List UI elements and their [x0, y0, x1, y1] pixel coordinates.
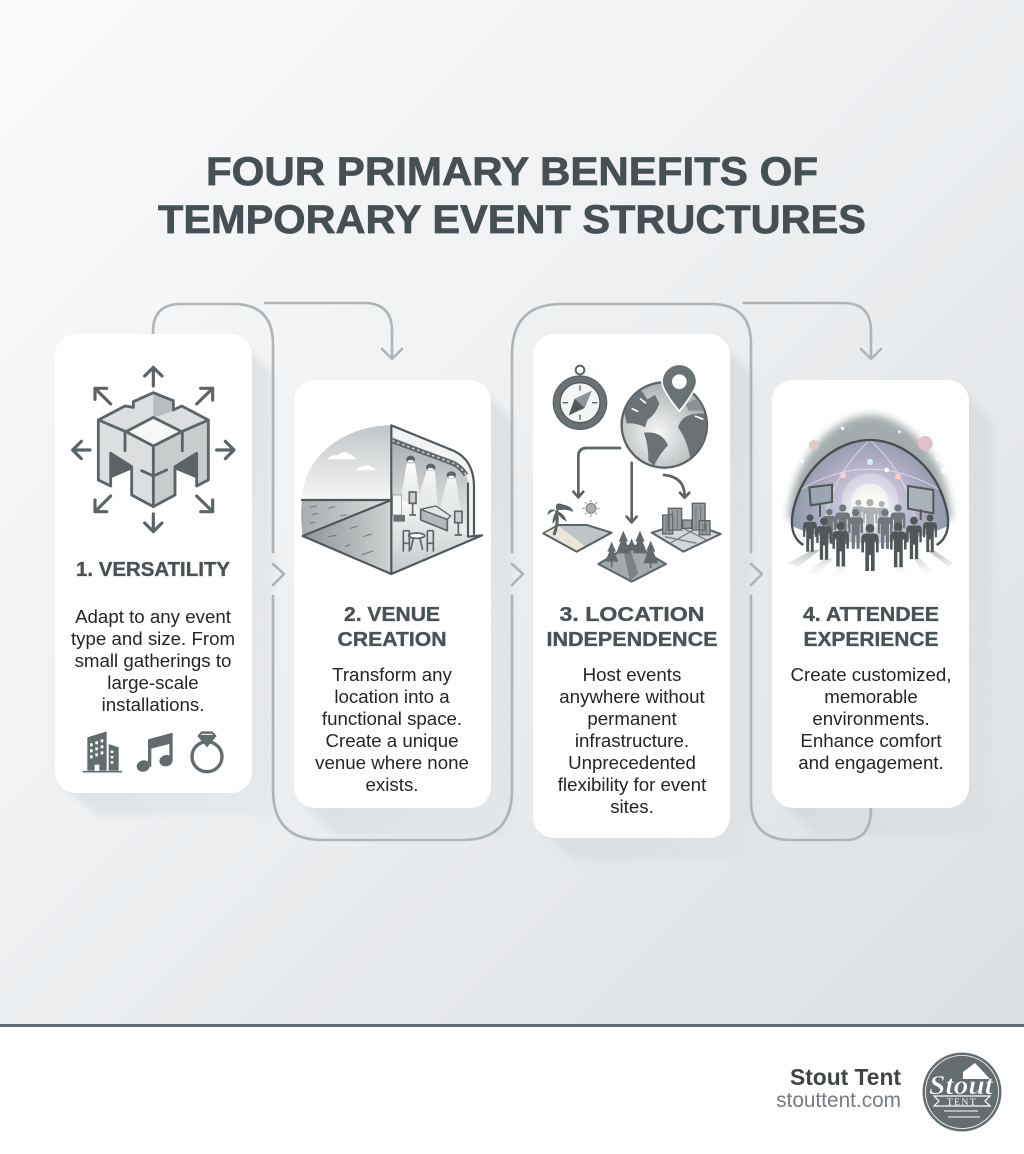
beach — [543, 500, 612, 552]
icon: compass, globe and destinations — [543, 364, 721, 582]
text: versatility description: type and size. From — [71, 628, 235, 649]
text: venue creation description: venue where none — [315, 752, 469, 773]
text: attendee experience description: Enhance comfort — [800, 730, 942, 751]
icon: open land transformed into a venue — [301, 425, 482, 574]
chevron: step 3 to 4 — [751, 564, 762, 585]
connector: flow line from card 1 through card 3 — [153, 304, 871, 840]
city — [652, 503, 721, 552]
arrow: into card 2 — [265, 303, 402, 359]
title — [158, 150, 866, 242]
text: versatility description: Adapt to any event — [75, 606, 232, 627]
heading: venue creation — [338, 604, 446, 651]
brand name: Stout Tent — [790, 1064, 901, 1090]
footer — [0, 1024, 1024, 1154]
arrows — [573, 448, 689, 522]
text: location independence description — [558, 664, 707, 817]
text: versatility description: large-scale — [107, 672, 199, 693]
text: location independence description: sites. — [610, 796, 654, 817]
logo: Stout — [929, 1070, 995, 1100]
brand url: stouttent.com — [776, 1089, 901, 1112]
panel: attendee experience — [772, 380, 969, 808]
globe — [622, 382, 708, 468]
text: venue creation description: exists. — [366, 774, 418, 795]
logo — [922, 1052, 1002, 1132]
chevron: step 1 to 2 — [273, 564, 284, 585]
compass — [553, 366, 607, 429]
panel: versatility — [55, 334, 252, 793]
heading: location independence: INDEPENDENCE — [546, 629, 718, 651]
logo: TENT — [947, 1098, 977, 1108]
text: venue creation description: Transform any — [332, 664, 453, 685]
heading: attendee experience: EXPERIENCE — [804, 629, 938, 651]
panel: location independence — [533, 334, 730, 838]
card shadows — [60, 340, 992, 860]
panel: venue creation — [294, 380, 491, 808]
text: attendee experience description: environments. — [812, 708, 930, 729]
heading: venue creation: CREATION — [338, 629, 446, 651]
text: location independence description: permanent — [587, 708, 677, 729]
icon: crowd under a glowing dome — [788, 415, 953, 581]
forest — [598, 531, 666, 582]
arrow: into card 4 — [744, 303, 881, 359]
heading: attendee experience: 4. ATTENDEE — [803, 604, 939, 626]
map pin — [662, 364, 697, 411]
text: venue creation description — [315, 664, 469, 795]
heading: versatility: 1. VERSATILITY — [76, 559, 231, 581]
text: versatility description: small gatherings to — [75, 650, 231, 671]
title: TEMPORARY EVENT STRUCTURES — [158, 198, 866, 242]
heading: location independence: 3. LOCATION — [560, 604, 704, 626]
text: location independence description: infrastructure. — [575, 730, 689, 751]
heading: attendee experience — [803, 604, 939, 651]
icons: building, music, ring — [83, 731, 222, 773]
title: FOUR PRIMARY BENEFITS OF — [206, 150, 818, 194]
text: attendee experience description: and engagement. — [798, 752, 944, 773]
text: venue creation description: Create a unique — [326, 730, 458, 751]
text: versatility description: installations. — [102, 694, 204, 715]
text: attendee experience description: memorable — [824, 686, 918, 707]
text: location independence description: flexibility for event — [558, 774, 707, 795]
text: attendee experience description: Create customized, — [790, 664, 952, 685]
text: venue creation description: location into a — [334, 686, 450, 707]
text: versatility description — [71, 606, 235, 715]
icon: expanding modular structure — [73, 367, 234, 532]
heading: venue creation: 2. VENUE — [344, 604, 440, 626]
text: location independence description: Unprecedented — [568, 752, 696, 773]
chevron: step 2 to 3 — [512, 564, 523, 585]
text: location independence description: Host events — [583, 664, 681, 685]
heading: location independence — [546, 604, 718, 651]
text: location independence description: anywhere without — [559, 686, 706, 707]
text: attendee experience description — [790, 664, 952, 773]
text: venue creation description: functional space. — [322, 708, 462, 729]
